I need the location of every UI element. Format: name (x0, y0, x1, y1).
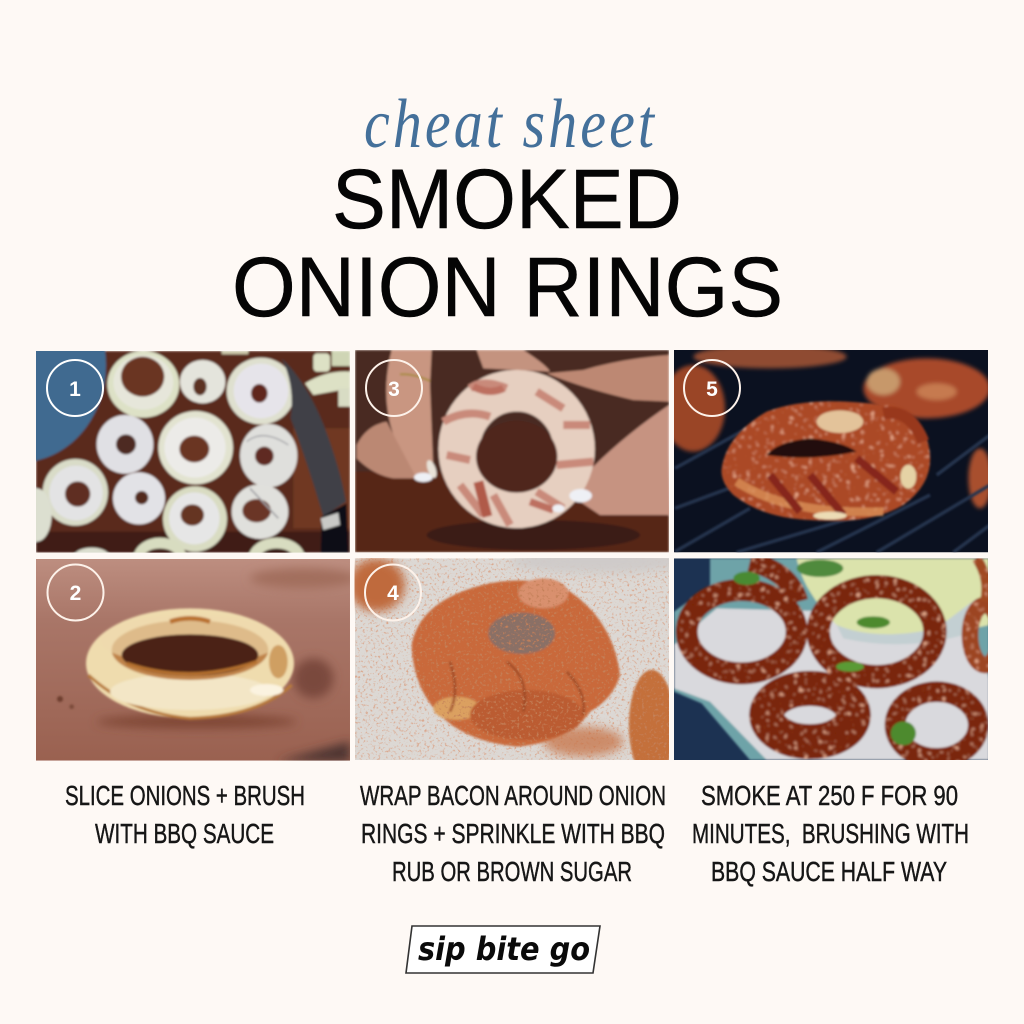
photo 5: bbq glazed ring on smoker grill (662, 345, 992, 552)
script heading: cheat sheet: cheat sheet (364, 85, 656, 162)
caption: step 1 and 2: WITH BBQ SAUCE (95, 818, 274, 849)
caption: step 3 and 4 (360, 780, 666, 887)
title: smoked onion rings: SMOKED (332, 152, 682, 246)
photo 3: hands wrapping bacon around onion ring (355, 350, 670, 552)
number badge 4 (365, 564, 421, 620)
photo 4: seasoned bacon wrapped ring on plate (348, 550, 683, 780)
number badge 4: 4 (387, 582, 399, 605)
caption: step 5 (692, 780, 969, 887)
caption: step 3 and 4: RUB OR BROWN SUGAR (392, 856, 632, 887)
photo 1: sliced onions on cutting board (36, 351, 350, 553)
number badge 5 (684, 360, 740, 416)
number badge 2: 2 (70, 582, 81, 605)
photo 2: onion ring brushed with bbq sauce (36, 559, 357, 762)
title: smoked onion rings: ONION RINGS (232, 240, 783, 334)
number badge 5: 5 (706, 378, 718, 401)
number badge 1 (47, 360, 103, 416)
caption: step 1 and 2 (65, 780, 305, 849)
caption: step 5: SMOKE AT 250 F FOR 90 (701, 780, 958, 811)
caption: step 3 and 4: WRAP BACON AROUND ONION (360, 780, 666, 811)
number badge 2 (48, 564, 104, 620)
logo: sip bite go: sip bite go (418, 930, 590, 968)
caption: step 3 and 4: RINGS + SPRINKLE WITH BBQ (361, 818, 665, 849)
number badge 1: 1 (69, 378, 81, 401)
photo 6: finished glazed onion rings on plate (674, 558, 1000, 760)
caption: step 5: BBQ SAUCE HALF WAY (711, 856, 947, 887)
number badge 3: 3 (388, 378, 400, 401)
title: smoked onion rings (232, 152, 783, 334)
caption: step 1 and 2: SLICE ONIONS + BRUSH (65, 780, 305, 811)
number badge 3 (366, 360, 422, 416)
